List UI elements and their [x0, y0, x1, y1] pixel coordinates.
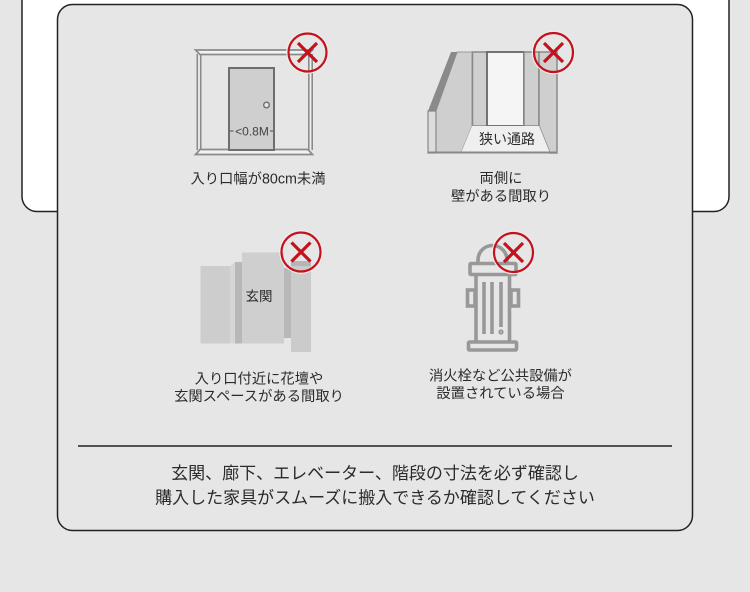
main grey card — [58, 4, 692, 530]
icon: red prohibition mark — [280, 231, 322, 273]
item: walls on both sides — [428, 32, 574, 205]
item: flower bed near entrance — [174, 231, 344, 405]
bottom note: 玄関、廊下、エレベーター、階段の寸法を必ず確認し — [171, 464, 579, 483]
icon: entrance plan — [200, 252, 311, 352]
label: walls on both sides: 壁がある間取り — [451, 188, 551, 205]
label: public equipment — [429, 368, 572, 402]
label: narrow entrance: 入り口幅が80cm未満 — [190, 170, 326, 188]
bottom note: 購入した家具がスムーズに搬入できるか確認してください — [155, 488, 595, 508]
icon: door in wall frame — [196, 50, 312, 154]
item: public equipment — [429, 232, 572, 402]
icon: red prohibition mark — [287, 32, 328, 73]
bottom note — [155, 464, 595, 508]
item: narrow entrance — [190, 32, 328, 188]
label: walls on both sides — [451, 170, 551, 205]
icon: narrow corridor: 狭い通路 — [479, 131, 535, 147]
icon: red prohibition mark — [532, 32, 574, 74]
icon: narrow corridor — [428, 52, 557, 153]
label: public equipment: 消火栓など公共設備が — [429, 368, 572, 384]
label: walls on both sides: 両側に — [480, 170, 522, 187]
label: flower bed near entrance: 玄関スペースがある間取り — [174, 388, 344, 405]
label: flower bed near entrance: 入り口付近に花壇や — [195, 370, 323, 388]
label: flower bed near entrance — [174, 370, 344, 405]
icon: fire hydrant — [468, 246, 518, 350]
white background panel — [22, 0, 729, 212]
icon: red prohibition mark — [492, 232, 534, 274]
icon: entrance plan: 玄関 — [246, 289, 272, 304]
icon: door in wall frame: <0.8M — [235, 124, 269, 138]
label: public equipment: 設置されている場合 — [436, 385, 565, 402]
